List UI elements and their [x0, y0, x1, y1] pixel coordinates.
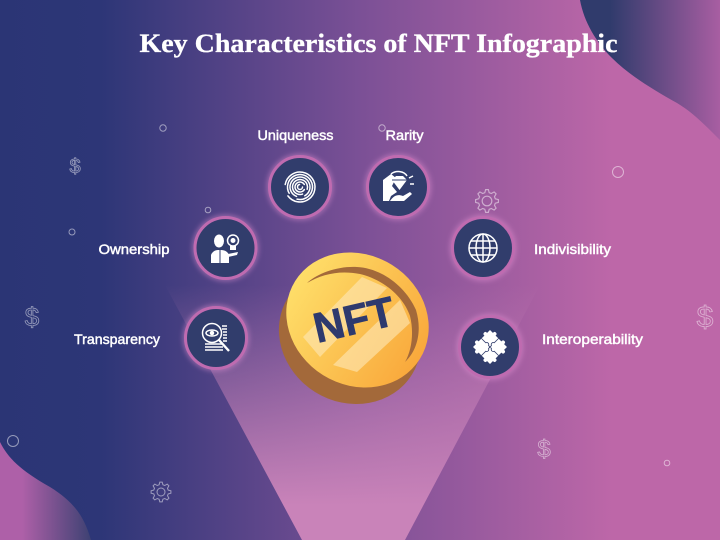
NFT coin	[278, 252, 429, 404]
icon: magnifier over document	[202, 324, 229, 351]
item: Rarity	[364, 127, 432, 220]
top-right wave	[580, 0, 720, 140]
coin label: NFT	[309, 287, 399, 352]
decorative dollar signs: $	[697, 301, 714, 334]
coin edge	[253, 241, 447, 431]
item: Interoperability: Interoperability	[542, 331, 643, 347]
item: Rarity: Rarity	[386, 127, 424, 143]
decorative bubbles	[8, 125, 670, 466]
decorative gear bottom left	[151, 482, 171, 502]
decorative dollar signs: $	[537, 436, 551, 463]
icon: fingerprint	[283, 170, 317, 204]
coin crescent	[307, 267, 419, 362]
spotlight beam	[165, 285, 540, 540]
item: Ownership: Ownership	[98, 241, 170, 257]
item: Interoperability	[456, 314, 643, 380]
coin shine stripes	[303, 277, 410, 372]
bottom-left wave	[0, 442, 91, 540]
item: Transparency: Transparency	[74, 331, 160, 347]
title: Key Characteristics of NFT Infographic	[140, 28, 618, 58]
decorative gear top right	[476, 190, 498, 212]
item: Transparency	[74, 304, 250, 372]
coin face	[261, 226, 454, 414]
item: Ownership	[98, 214, 259, 282]
decorative dollar signs: $	[69, 156, 81, 178]
icon: diamond in hand	[383, 172, 414, 201]
item: Uniqueness	[258, 127, 334, 220]
decorative dollar signs: $	[25, 302, 40, 332]
icon: globe	[469, 234, 497, 262]
item: Indivisibility	[450, 214, 611, 282]
icon: person with light bulb	[211, 234, 238, 263]
item: Indivisibility: Indivisibility	[534, 241, 611, 257]
item: Uniqueness: Uniqueness	[258, 127, 334, 143]
decorative dollar signs	[25, 156, 714, 463]
icon: puzzle pieces	[470, 327, 510, 367]
